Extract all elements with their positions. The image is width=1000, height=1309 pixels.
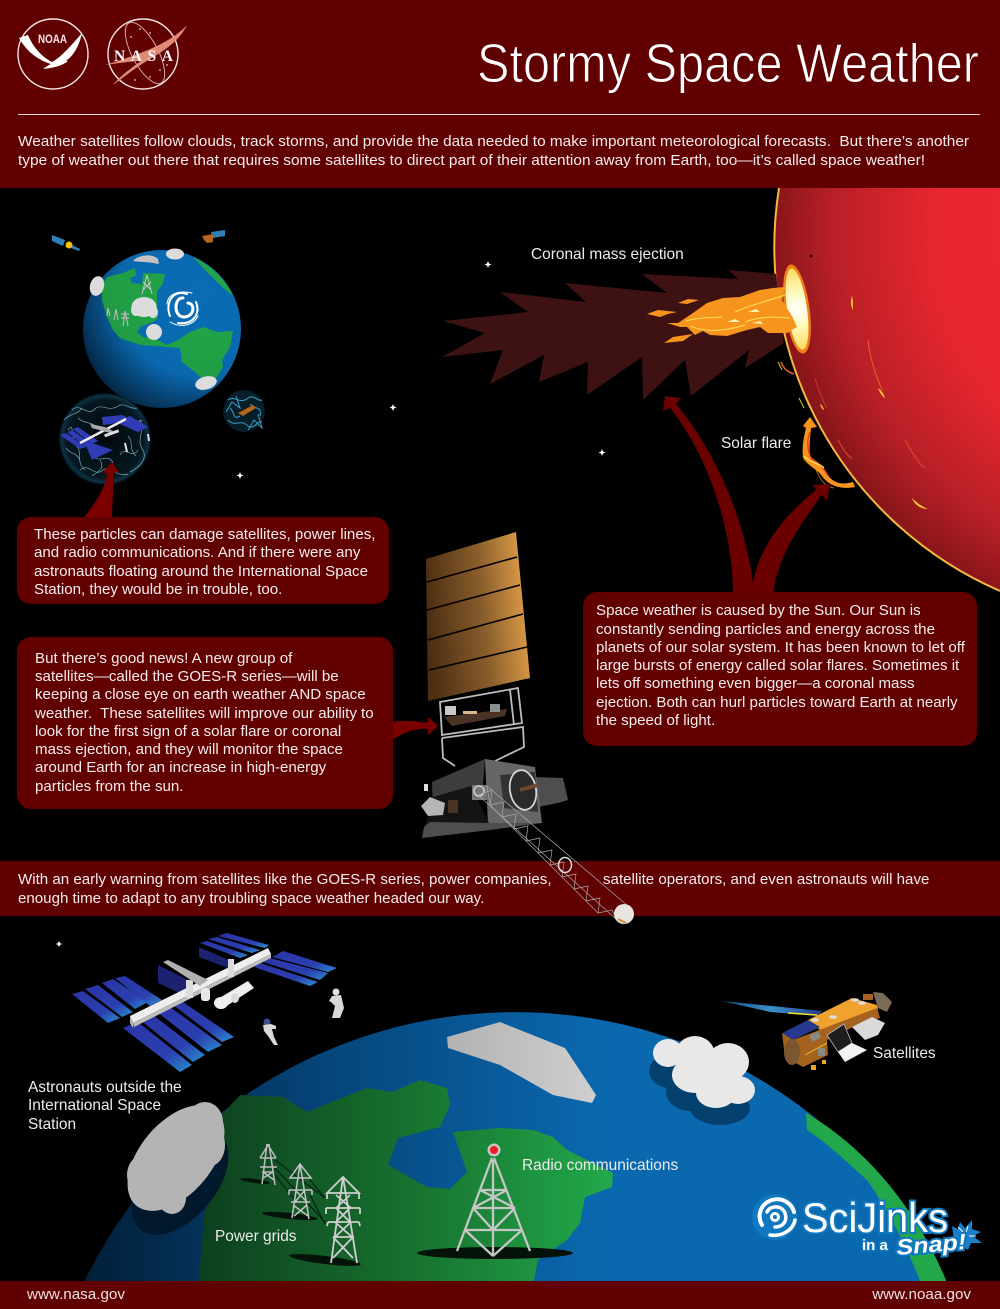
callout: particles damage: These particles can damage satellites, power lines, xyxy=(34,526,375,543)
arrows: sun box to CME and flare xyxy=(663,396,830,594)
label: astronauts: International Space xyxy=(28,1097,161,1114)
callout: good news: particles from the sun. xyxy=(35,778,183,795)
small satellite left xyxy=(52,235,80,251)
stars xyxy=(56,261,606,947)
callout: sun explanation: lets off something even bigger—a coronal mass xyxy=(596,675,915,692)
header panel xyxy=(0,0,1000,188)
callout: sun explanation: ejection. Both can hurl particles toward Earth at nearly xyxy=(596,694,958,711)
radio tower xyxy=(417,1144,573,1259)
band: early warning: With an early warning from satellites like the GOES-R series, power companies, xyxy=(18,871,552,888)
instrument frame xyxy=(440,688,524,766)
logo: NOAA xyxy=(18,19,88,89)
callout: sun explanation: constantly sending particles and energy across the xyxy=(596,621,935,638)
boom ring xyxy=(558,858,572,872)
intro text: Weather satellites follow clouds, track storms, and provide the data needed to make important meteorological forecasts. But there’s another xyxy=(18,133,969,150)
instrument shelf xyxy=(444,704,507,726)
band: early warning: satellite operators, and even astronauts will have xyxy=(603,871,929,888)
small power towers xyxy=(107,308,129,326)
intro text xyxy=(18,133,969,169)
small station panels xyxy=(60,415,148,460)
tower medium xyxy=(289,1164,312,1219)
logo: NOAA: NOAA xyxy=(38,34,67,46)
right cloud xyxy=(649,1036,755,1125)
arrow to station xyxy=(82,462,119,520)
callout: particles damage xyxy=(17,462,389,604)
small earth clouds xyxy=(88,248,218,392)
astronaut 2 xyxy=(329,988,344,1018)
label: astronauts xyxy=(28,1079,182,1133)
label: astronauts: Astronauts outside the xyxy=(28,1079,182,1096)
GOES-R satellite xyxy=(421,532,634,924)
small satellite right xyxy=(202,230,225,243)
label: power grids: Power grids xyxy=(215,1228,297,1245)
callout: particles damage: and radio communications. And if there were any xyxy=(34,544,361,561)
callout: good news: keeping a close eye on earth weather AND space xyxy=(35,686,366,703)
logo spiral xyxy=(752,1194,798,1240)
astronaut 1 xyxy=(263,1018,278,1045)
solar flare xyxy=(778,362,855,488)
band: early warning xyxy=(0,861,1000,916)
logo: NASA xyxy=(105,17,187,89)
truss xyxy=(130,948,271,1028)
spacecraft body xyxy=(421,759,568,838)
label: solar flare: Solar flare xyxy=(721,435,791,452)
International Space Station xyxy=(72,933,344,1072)
callout: good news: around Earth for an increase in high-energy xyxy=(35,759,327,776)
brown hull xyxy=(782,1008,880,1067)
SciJinks logo xyxy=(752,1194,982,1260)
callout: good news: weather. These satellites will improve our ability to xyxy=(34,705,374,722)
header rule xyxy=(18,114,980,115)
callout: good news: mass ejection, and they will monitor the space xyxy=(35,741,343,758)
small earth xyxy=(83,248,241,408)
modules xyxy=(163,960,254,1009)
station in particle storm xyxy=(58,392,152,486)
boom tip xyxy=(614,904,634,924)
solar face xyxy=(782,1020,820,1040)
logo snap: Snap! xyxy=(895,1229,967,1260)
logo burst xyxy=(952,1220,982,1250)
footer: www.noaa.gov xyxy=(871,1286,971,1303)
label: coronal mass ejection: Coronal mass ejection xyxy=(531,246,684,263)
solar panels xyxy=(72,933,337,1072)
top deck xyxy=(808,998,878,1030)
left cloud xyxy=(109,1087,247,1253)
CME burst shape xyxy=(442,270,784,400)
logo wordmark: SciJinks xyxy=(802,1194,948,1241)
small radio tower xyxy=(142,275,152,294)
dark panel faces xyxy=(158,947,233,998)
solar array xyxy=(426,532,530,701)
satellite in particle storm xyxy=(223,390,265,432)
tower large xyxy=(326,1177,360,1263)
ice xyxy=(447,1022,596,1103)
hurricane spiral xyxy=(167,292,198,325)
land xyxy=(198,1080,613,1285)
power lines xyxy=(275,1160,325,1224)
flame xyxy=(647,263,816,355)
power grid towers xyxy=(240,1144,361,1268)
callout: good news: satellites—called the GOES-R series—will be xyxy=(35,668,339,685)
footer: www.nasa.gov xyxy=(26,1286,125,1303)
label: satellites: Satellites xyxy=(873,1045,936,1062)
tower small xyxy=(260,1144,277,1185)
logo tagline: in a xyxy=(862,1237,888,1254)
satellite xyxy=(722,992,892,1070)
callout: good news: But there’s good news! A new group of xyxy=(35,650,293,667)
label: astronauts: Station xyxy=(28,1116,76,1133)
label: radio communications: Radio communications xyxy=(522,1157,678,1174)
tower shadows xyxy=(240,1177,361,1268)
footer xyxy=(0,1281,1000,1309)
beam panel xyxy=(722,1001,822,1016)
coronal mass ejection xyxy=(442,263,816,400)
logo: NASA: NASA xyxy=(114,48,174,65)
callout: sun explanation: large bursts of energy called solar flares. Sometimes it xyxy=(596,657,960,674)
callout: sun explanation: the speed of light. xyxy=(596,712,715,729)
sun xyxy=(774,188,1000,591)
green strip xyxy=(806,1113,948,1285)
band: early warning: enough time to adapt to any troubling space weather headed our way. xyxy=(18,890,484,907)
callout: sun explanation xyxy=(583,592,977,746)
continents xyxy=(102,257,233,395)
bottom earth xyxy=(83,1012,948,1285)
callout: sun explanation: planets of our solar system. It has been known to let off xyxy=(596,639,966,656)
callout: particles damage: Station, they would be in trouble, too. xyxy=(34,581,282,598)
intro text: type of weather out there that requires some satellites to direct part of their attention away from Earth, too—it’s called space weather! xyxy=(18,152,925,169)
callout: good news: look for the first sign of a solar flare or coronal xyxy=(35,723,341,740)
equipment xyxy=(827,1024,852,1052)
callout: good news xyxy=(17,637,438,809)
callout: particles damage: astronauts floating around the International Space xyxy=(34,563,368,580)
particle lines xyxy=(64,405,144,476)
arrow to GOES-R xyxy=(390,717,438,742)
boom lattice xyxy=(478,786,628,920)
callout: sun explanation: Space weather is caused by the Sun. Our Sun is xyxy=(596,602,921,619)
